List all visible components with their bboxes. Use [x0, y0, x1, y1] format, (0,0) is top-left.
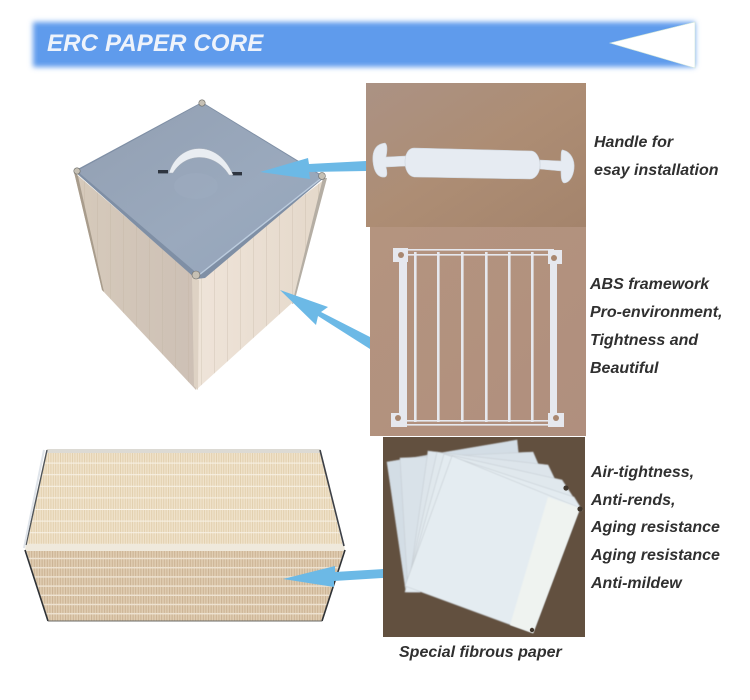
- fanned paper sheets: [387, 440, 582, 633]
- label: paper properties: Anti-rends,: [590, 492, 675, 509]
- white frame: [391, 248, 564, 427]
- wide core product photo: [24, 449, 345, 621]
- cube left face: [74, 172, 196, 390]
- handle photo: [366, 83, 586, 227]
- core front face: [26, 550, 344, 621]
- arrow to cube lid: [260, 158, 366, 179]
- label: paper properties: Aging resistance: [590, 519, 720, 536]
- caption: special fibrous paper: Special fibrous paper: [399, 644, 562, 661]
- core top face: [26, 451, 343, 547]
- frame corners: [393, 248, 408, 262]
- label: handle: esay installation: [594, 162, 719, 179]
- core white edges: [25, 544, 345, 551]
- title text: ERC PAPER CORE: [47, 30, 264, 57]
- title banner: [33, 22, 695, 68]
- label: handle: Handle for: [594, 134, 674, 151]
- paper punch holes: [530, 485, 583, 632]
- label: ABS framework: Beautiful: [590, 360, 659, 377]
- banner notch: [610, 22, 695, 68]
- ABS frame photo: [370, 227, 586, 436]
- label: ABS framework: Pro-environment,: [590, 304, 722, 321]
- label: ABS framework: [589, 276, 722, 377]
- arrow to core: [283, 566, 383, 587]
- plastic handle: [373, 143, 574, 183]
- label: ABS framework: ABS framework: [589, 276, 710, 293]
- label: paper properties: Aging resistance: [590, 547, 720, 564]
- cube right face: [196, 179, 325, 390]
- label: paper properties: Air-tightness,: [590, 464, 694, 481]
- label: ABS framework: Tightness and: [590, 332, 699, 349]
- label: paper properties: [590, 464, 720, 592]
- cube top face: [74, 102, 325, 279]
- arrow to cube side: [280, 290, 370, 349]
- fibrous paper photo: [383, 437, 585, 637]
- label: handle: [594, 134, 719, 179]
- cube product photo: [74, 100, 327, 390]
- label: paper properties: Anti-mildew: [590, 575, 683, 592]
- lid corner caps: [74, 100, 325, 279]
- paper light band: [510, 497, 580, 633]
- lid handle: [158, 148, 242, 199]
